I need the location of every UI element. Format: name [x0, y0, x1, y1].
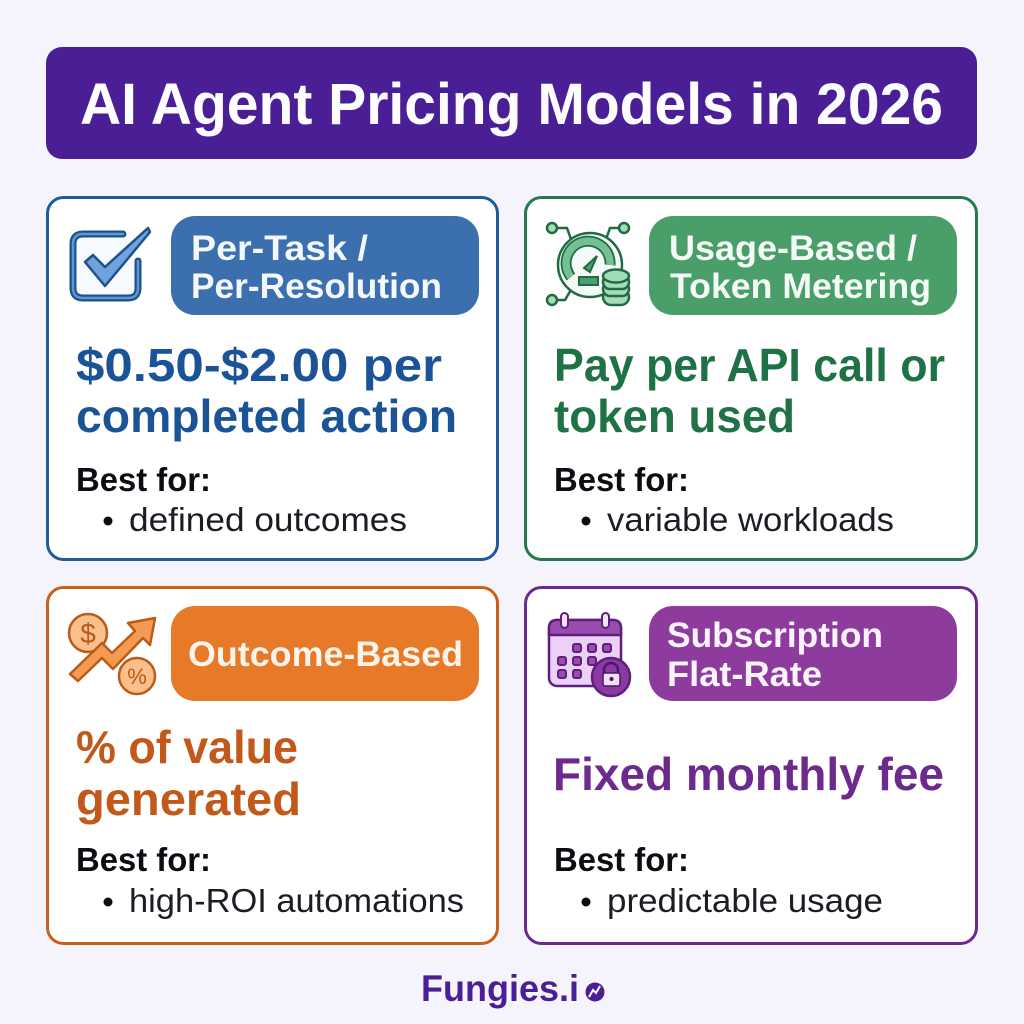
pill heading: usage-based: Usage-Based /	[669, 229, 917, 268]
logo mark	[586, 982, 604, 1002]
icon: checkbox with checkmark	[73, 228, 150, 298]
price headline	[76, 339, 457, 442]
title text: AI Agent Pricing Models in 2026	[80, 72, 943, 137]
pill heading: subscription: Flat-Rate	[667, 655, 822, 694]
icon: rising arrow with dollar and percent coins: $	[80, 618, 96, 649]
best for list: Best for:	[554, 841, 689, 878]
best for list: Best for:	[76, 841, 211, 878]
best for list: Best for:	[554, 461, 689, 498]
pill heading: per-task	[171, 216, 479, 315]
best for list	[554, 461, 894, 538]
panel: subscription flat-rate pricing	[526, 588, 976, 944]
best for list: Best for:	[76, 461, 211, 498]
price headline	[554, 339, 945, 442]
icon: rising arrow with dollar and percent coins: %	[127, 664, 147, 689]
best for list	[76, 841, 464, 919]
price headline: % of value	[76, 721, 298, 773]
pill heading: outcome-based: Outcome-Based	[188, 635, 463, 674]
best for list: high-ROI automations	[129, 882, 464, 919]
pill heading: usage-based	[649, 216, 957, 315]
panel: outcome-based pricing	[48, 588, 498, 944]
price headline: token used	[554, 390, 795, 442]
pill heading: outcome-based	[171, 606, 479, 701]
pill heading: subscription: Subscription	[667, 616, 883, 655]
icon: gauge and database	[547, 223, 629, 305]
icon: rising arrow with dollar and percent coins	[69, 614, 155, 694]
panel: usage-based pricing	[526, 198, 976, 560]
price headline	[76, 721, 301, 825]
best for list: predictable usage	[607, 882, 883, 919]
footer logo: Fungies.io: Fungies.i	[421, 968, 579, 1009]
panel: per-task pricing	[48, 198, 498, 560]
best for list: variable workloads	[607, 501, 894, 538]
price headline: generated	[76, 773, 301, 825]
pill heading: subscription	[649, 606, 957, 701]
price headline: Fixed monthly fee	[553, 748, 944, 800]
best for list	[76, 461, 407, 538]
pill heading: usage-based: Token Metering	[670, 267, 931, 306]
best for list: defined outcomes	[129, 501, 407, 538]
icon: calendar with padlock	[549, 613, 630, 696]
pill heading: per-task: Per-Resolution	[191, 267, 442, 306]
pill heading: per-task: Per-Task /	[191, 229, 368, 268]
best for list	[554, 841, 883, 919]
price headline: Pay per API call or	[554, 339, 945, 391]
price headline: completed action	[76, 390, 457, 442]
price headline: $0.50-$2.00 per	[76, 339, 442, 391]
title banner	[46, 47, 977, 159]
